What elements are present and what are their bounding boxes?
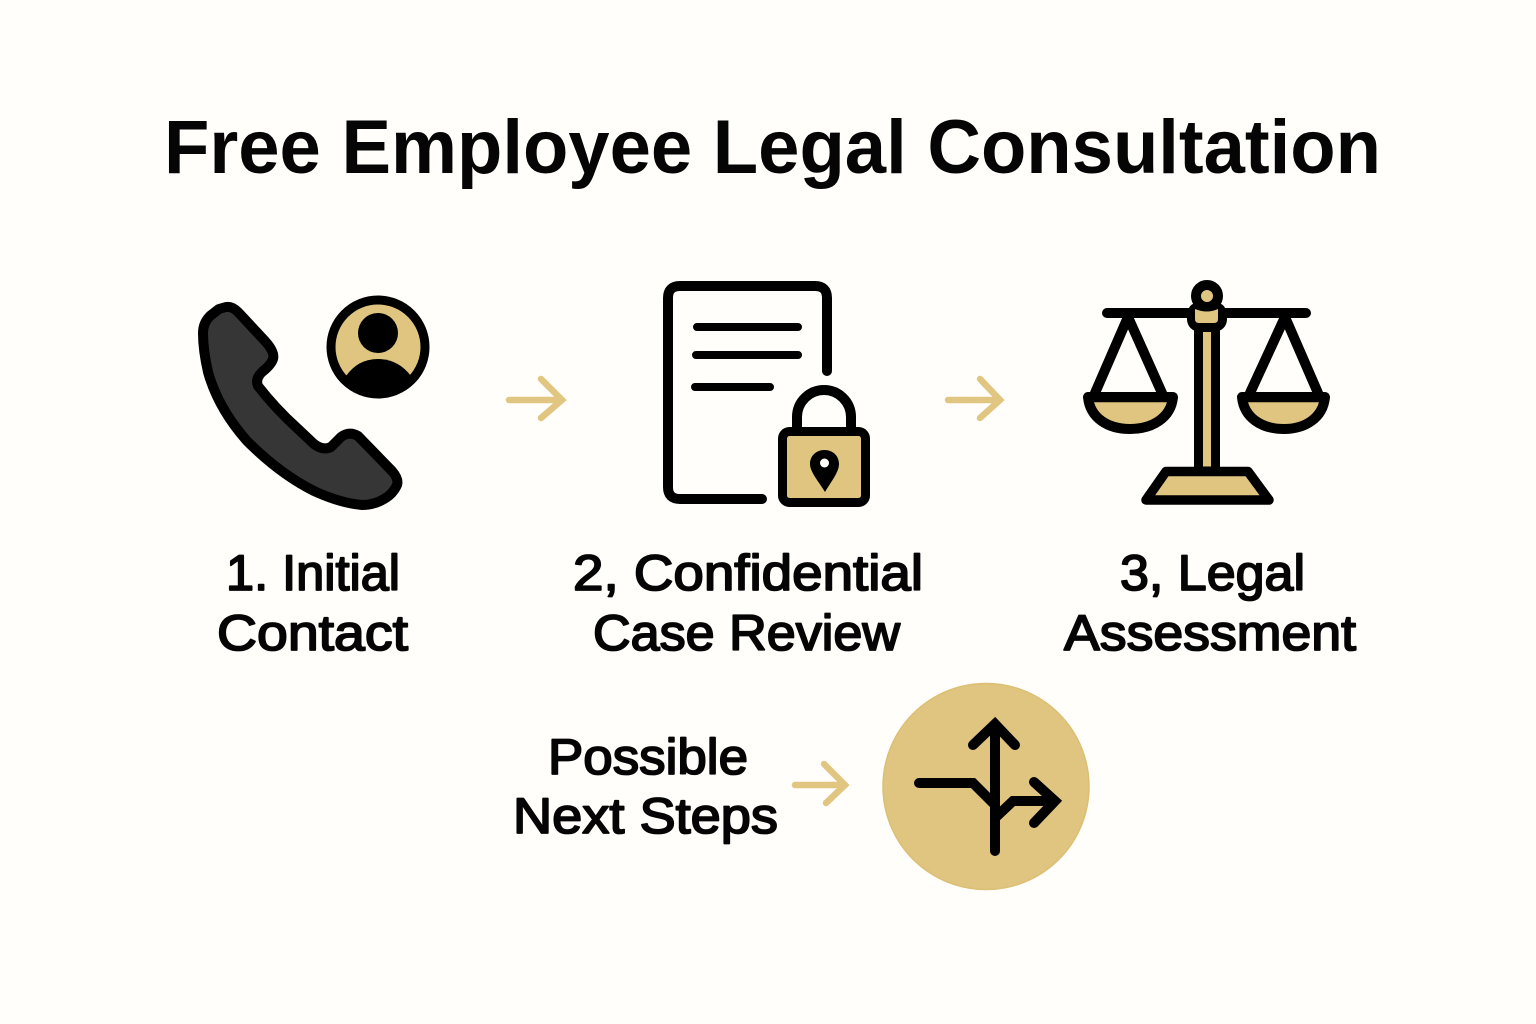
icon: padlock xyxy=(782,390,866,502)
next steps label: Next Steps xyxy=(513,788,778,844)
step 2 label: 2, Confidential xyxy=(573,545,923,601)
arrow: step 2 to step 3 xyxy=(948,379,1000,418)
icon: balance scales xyxy=(1088,285,1325,500)
step 3 label: Assessment xyxy=(1064,605,1356,661)
step 1 label: Contact xyxy=(217,605,408,661)
panel: step 1 initial contact xyxy=(203,300,425,661)
icon: document xyxy=(668,286,827,499)
next steps label xyxy=(513,729,778,844)
icon: branching arrows in gold circle xyxy=(883,684,1089,890)
title: Free Employee Legal Consultation xyxy=(164,105,1381,190)
arrow: to next steps xyxy=(795,764,845,803)
panel: step 2 confidential case review xyxy=(573,286,923,661)
step 2 label: Case Review xyxy=(593,605,901,661)
step 3 label: 3, Legal xyxy=(1120,545,1305,601)
step 1 label: 1. Initial xyxy=(226,545,400,601)
next steps label: Possible xyxy=(548,729,748,785)
step 2 label xyxy=(573,545,923,661)
step 3 label xyxy=(1064,545,1356,661)
icon: telephone handset xyxy=(203,307,397,505)
step 1 label xyxy=(217,545,408,661)
arrow: step 1 to step 2 xyxy=(509,379,562,418)
icon: person avatar xyxy=(331,300,425,397)
panel: step 3 legal assessment xyxy=(1064,285,1356,661)
panel: possible next steps xyxy=(513,684,1089,890)
